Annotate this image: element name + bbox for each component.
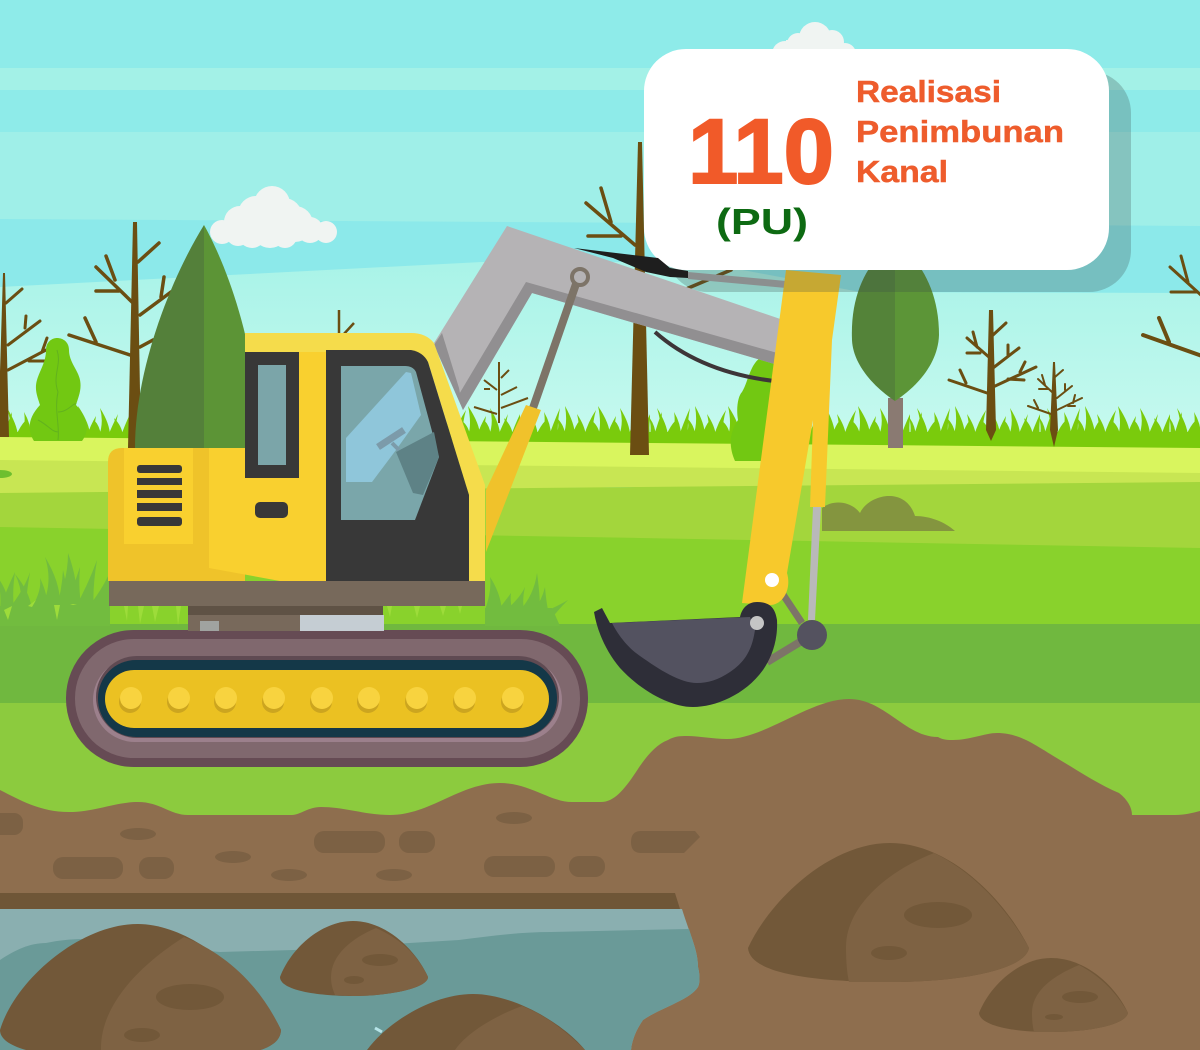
bare tree behind cone [69,222,171,448]
bucket links [767,593,802,662]
bare tree centre [586,142,731,455]
connecting rod [688,272,786,288]
rock in water lower [367,994,585,1050]
rock on soil small [979,958,1128,1032]
bush behind arm [731,358,790,461]
track rollers [119,687,524,713]
bush left [30,338,87,441]
card shadow [666,71,1131,292]
rock in water left [0,924,281,1050]
bare tree right two [1028,362,1082,447]
bare tree far left [0,273,47,437]
soil bricks [0,812,700,881]
side window [245,352,299,478]
rock in water middle [280,921,428,996]
ground bands [0,437,1200,823]
rock on soil large [748,843,1029,982]
background mound [822,496,955,531]
card label: Kanal [856,154,948,189]
undercarriage [188,606,384,631]
small bare tree near boom [474,362,528,423]
hydraulic joint [797,620,827,650]
hydraulic rod lower [808,507,821,620]
horizon grass [0,400,1200,450]
foreground grass tufts [0,553,568,626]
tree with green crown [852,240,939,448]
cloud behind card [772,22,856,67]
soil embankment [0,699,1200,1050]
rear engine compartment [108,448,245,581]
track [66,630,588,767]
yellow stick arm [742,270,841,605]
platform [109,581,485,606]
boom piston [486,269,588,552]
bare tree right edge [1143,256,1200,356]
hydraulic hose [655,332,774,381]
excavator [66,226,841,767]
cone tree [135,225,260,448]
cloud left [210,186,337,248]
door handle [255,502,288,518]
card label: Penimbunan [856,114,1064,149]
number 110: 110 [688,101,834,203]
cab door and windshield [326,350,469,581]
grill vents [137,465,182,526]
small bare tree behind cab [339,310,354,345]
card label: Realisasi [856,74,1001,109]
bucket [594,602,777,707]
canal water [0,893,700,1050]
boom arm [434,226,795,410]
cab body [209,333,485,581]
card label [856,74,1064,189]
bare tree right one [949,310,1036,441]
info card [644,49,1109,270]
wiper [378,430,404,450]
sky background [0,0,1200,450]
source label: (PU) [716,201,808,242]
black boom tip over card [574,248,688,278]
